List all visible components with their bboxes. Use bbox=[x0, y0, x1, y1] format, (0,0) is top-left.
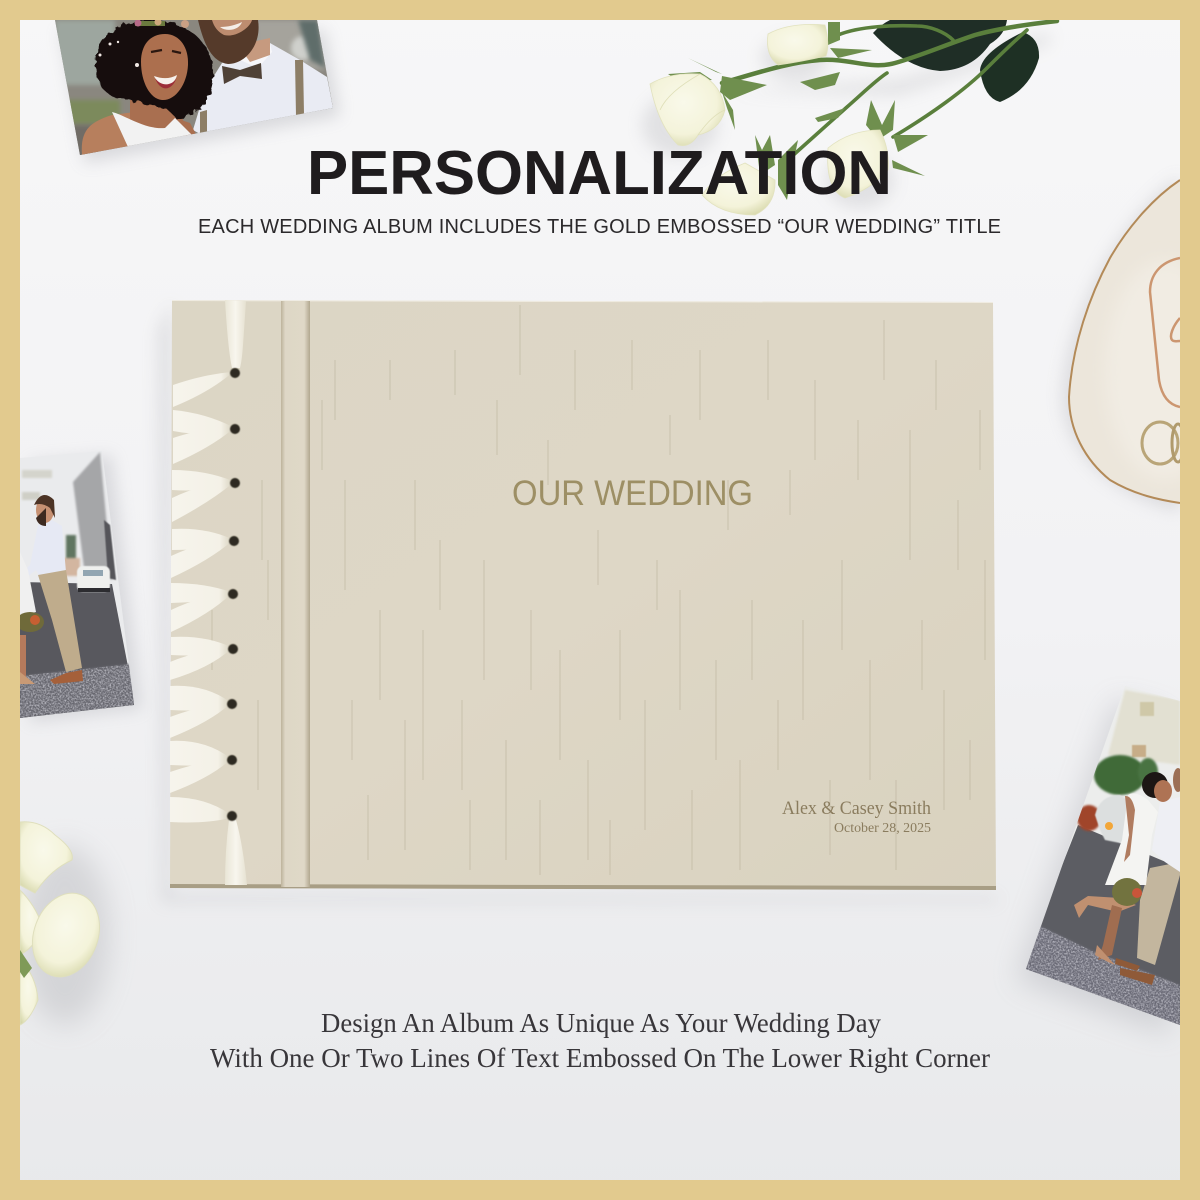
cloth fibers bbox=[212, 305, 985, 875]
white roses top right bbox=[642, 20, 1057, 215]
white roses bottom left bbox=[20, 822, 111, 1025]
leaves bbox=[873, 20, 1039, 102]
photo: couple portrait top left bbox=[50, 15, 340, 163]
description text bbox=[210, 1008, 990, 1073]
album cover bbox=[170, 300, 996, 890]
stems bbox=[722, 21, 1057, 158]
album shadow bbox=[158, 300, 998, 902]
sepals bbox=[668, 22, 928, 200]
top ribbon bbox=[225, 300, 246, 368]
subtitle: EACH WEDDING ALBUM INCLUDES THE GOLD EMBOSSED “OUR WEDDING” TITLE bbox=[198, 216, 1001, 238]
punched holes bbox=[227, 368, 240, 821]
spine groove bbox=[281, 301, 310, 887]
photo: couple on street left bbox=[15, 445, 142, 725]
embossed names: Alex & Casey Smith bbox=[782, 799, 931, 819]
bottom ribbon bbox=[225, 820, 247, 885]
description line 2: With One Or Two Lines Of Text Embossed On The Lower Right Corner bbox=[210, 1043, 990, 1073]
photo: couple on street right bbox=[1016, 680, 1185, 1035]
ribbon lacing bbox=[170, 300, 247, 885]
embossed date: October 28, 2025 bbox=[834, 820, 931, 835]
rose buds bbox=[650, 24, 888, 215]
album bbox=[158, 300, 998, 902]
wedding rings bbox=[1142, 422, 1184, 464]
title: PERSONALIZATION bbox=[307, 139, 892, 208]
description line 1: Design An Album As Unique As Your Wedding Day bbox=[321, 1008, 881, 1038]
embossed title: our wedding: OUR WEDDING bbox=[512, 474, 753, 513]
dish with rings bbox=[1060, 179, 1180, 510]
